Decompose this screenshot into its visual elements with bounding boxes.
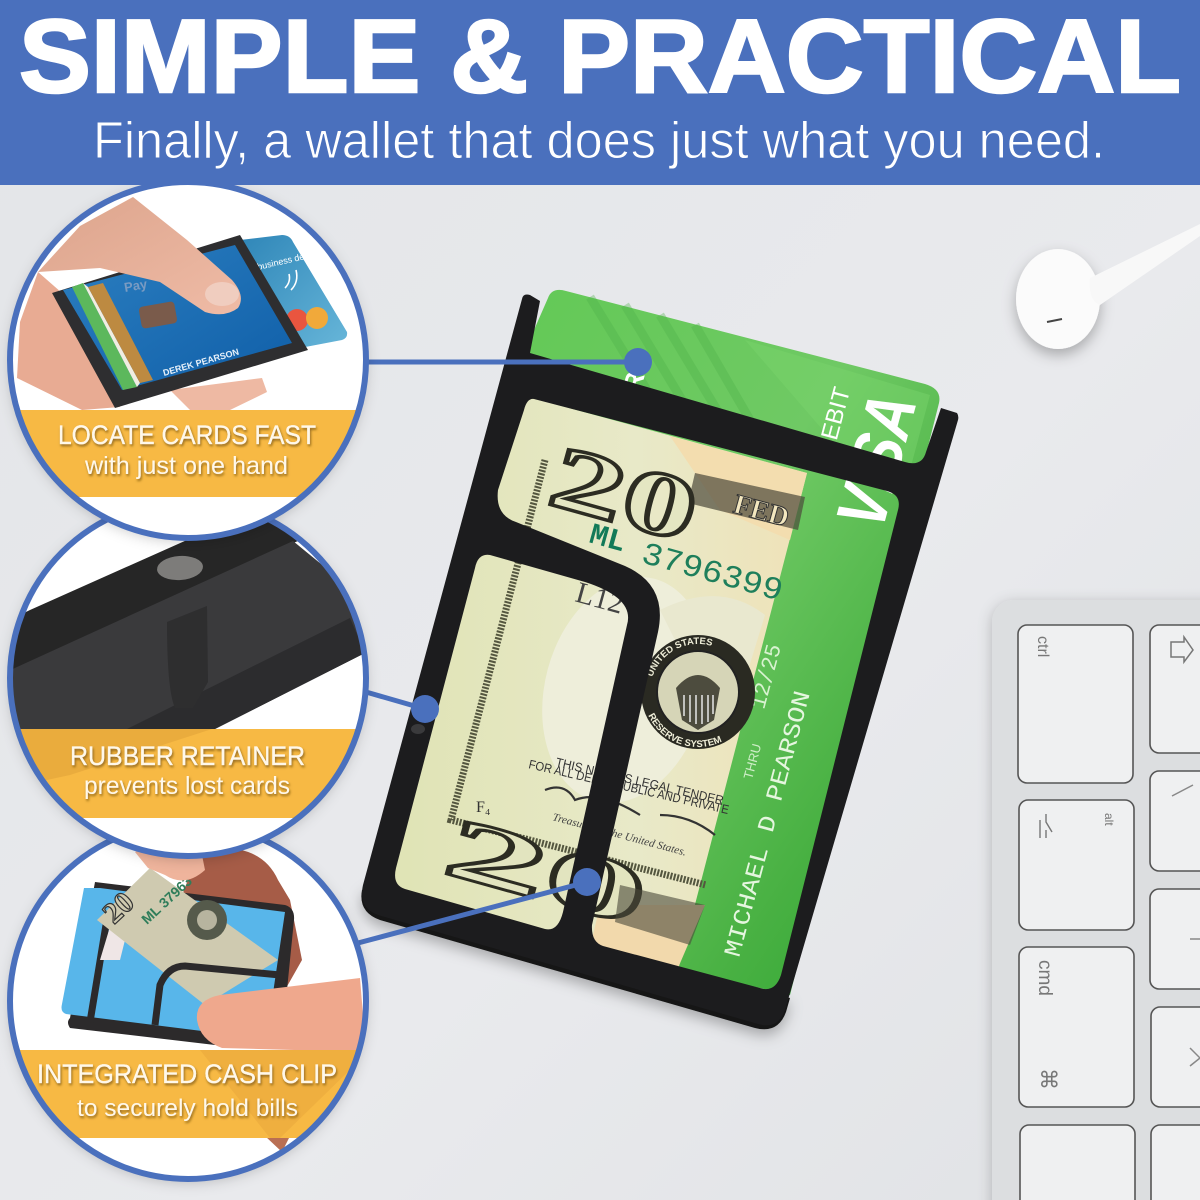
card logo: VISA: VISA [821,385,931,536]
photo: wallet lower ledge [125,618,365,730]
key: alt [1019,800,1134,930]
key: space corner [1020,1125,1135,1200]
photo: wallet clip bar [155,966,280,1025]
bill numeral: bottom 20: 20 [435,798,658,945]
bill seal: UNITED STATES [648,637,712,676]
photo: chip [138,301,178,329]
bill peach tint [670,436,807,540]
card text: cardholder: MICHAEL D PEARSON [721,688,818,960]
banner: cash clip [20,1050,356,1138]
wallet frame [362,294,958,1025]
title: SIMPLE & PRACTICAL [19,0,1181,115]
bill seal [642,635,755,749]
key: alt: alt [1102,813,1116,826]
photo: extended blue card: business debit [256,249,315,272]
wallet shadow plate [361,880,790,1029]
bill text: F4: F₄ [476,799,491,816]
photo: wallet frame [52,235,308,408]
photo: rubber peg [167,606,208,708]
panel: locate cards fast [0,182,380,538]
bill text: legal tender: FOR ALL DEBTS PUBLIC AND PRIVATE [527,757,730,817]
key: ctrl: ctrl [1034,636,1051,657]
card text: DEBIT: DEBIT [812,384,856,460]
photo: card stack edges [72,283,137,390]
panel: integrated cash clip [0,823,380,1179]
connector: locate cards [366,348,652,376]
connector: cash clip [358,868,601,943]
photo: thumb [197,978,366,1052]
subtitle: Finally, a wallet that does just what you need. [93,112,1105,170]
connector: rubber retainer [366,692,439,723]
bill signature [545,788,715,835]
bill lower band [615,885,705,945]
heading: rubber retainer: RUBBER RETAINER [70,741,305,771]
photo: card brand: Pay [123,276,149,295]
caption: locate cards: with just one hand [84,452,288,480]
photo: finger top [135,852,205,880]
photo: wallet edge top [13,522,298,669]
green card [480,290,939,995]
caption: cash clip: to securely hold bills [77,1095,298,1122]
photo: thumb [38,197,241,314]
photo: wallet and blue card [62,882,294,1045]
photo: folded bill: ML 37963 [138,873,195,927]
bill numeral: top 20: 20 [540,427,709,562]
key: cmd: ⌘ [1035,1068,1060,1090]
card text: R: R [617,368,651,395]
heading: integrated cash clip: INTEGRATED CASH CLIP [37,1059,337,1089]
photo: folded bill: 20 [96,886,141,930]
banner: rubber retainer [20,729,356,818]
header band [0,0,1200,185]
key: ctrl [1018,625,1133,783]
wallet assembly [321,290,958,1042]
bill frame [451,460,706,885]
bill text: legal tender: THIS NOTE IS LEGAL TENDER [554,755,725,808]
photo: card name: DEREK PEARSON [162,347,240,378]
key: cmd [1019,947,1134,1107]
icon: earbud [1016,224,1200,349]
photo: palm [17,272,120,410]
bill text: serial: ML [585,519,629,561]
photo: wallet edge face [0,541,365,730]
bill text: treasury: Treasurer of the United States. [551,811,688,859]
keyboard [992,600,1200,1200]
key: cmd: cmd [1034,960,1055,996]
photo: folded bill [96,868,278,1005]
panel: rubber retainer [0,500,380,856]
heading: locate cards fast: LOCATE CARDS FAST [58,420,316,450]
photo: hand behind wallet [180,848,302,990]
bill text: FED: FED [730,489,792,534]
photo: retainer hole [157,556,203,580]
banner: locate cards [20,410,356,497]
twenty dollar bill [395,398,807,966]
key column: right [1150,625,1200,1200]
photo: extended blue card [240,235,347,348]
bill text: L12: L12 [572,576,628,621]
keyboard body [992,600,1200,1200]
bill portrait watermark [518,558,732,822]
bill upper band [688,473,805,530]
twenty dollar bill: 3796399 [637,536,787,610]
caption: rubber retainer: prevents lost cards [84,772,290,800]
green card: 12/25 [747,642,788,712]
bill seal: RESERVE SYSTEM [648,712,722,748]
card text: expiry: THRU [740,742,764,781]
photo: blue card in wallet [63,245,292,390]
rubber retainer spot [411,724,425,734]
